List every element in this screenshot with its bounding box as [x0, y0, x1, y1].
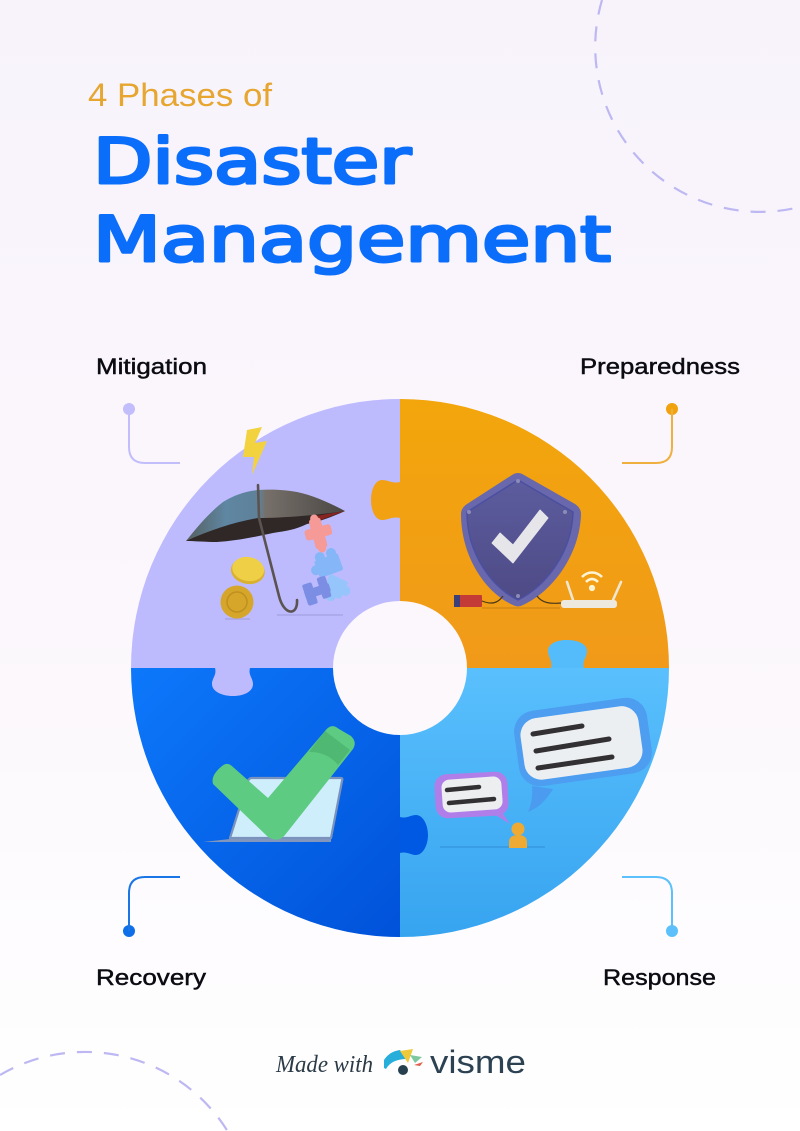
visme wordmark: visme: [430, 1044, 526, 1080]
check mark fold shadow: [309, 731, 350, 765]
laptop screen: [230, 778, 342, 838]
umbrella canopy: [186, 490, 345, 541]
ground shadows: [225, 615, 343, 619]
label: Mitigation: Mitigation: [96, 354, 207, 379]
label: Recovery: Recovery: [96, 965, 206, 990]
umbrella red lining: [312, 511, 345, 523]
puzzle tab: lilac into blue: [212, 668, 253, 696]
shield check mark: [492, 510, 548, 563]
coin top: [229, 554, 267, 587]
connector: Response: [622, 877, 678, 937]
made with text: Made with: [275, 1052, 373, 1078]
decorative dashed arc top right: [595, 0, 800, 212]
shield rivets: [467, 479, 567, 598]
router: [561, 582, 621, 608]
label: Preparedness: Preparedness: [580, 354, 740, 379]
shield outer: [461, 473, 581, 606]
puzzle tab: blue into sky: [400, 815, 428, 855]
puzzle wheel: [131, 399, 669, 937]
title block: [88, 77, 611, 276]
ground line: [440, 846, 545, 848]
puzzle piece light blue: [306, 546, 344, 580]
icon: speech bubbles with person: [434, 695, 655, 848]
label: Response: Response: [603, 965, 716, 990]
small speech bubble: [434, 771, 510, 824]
connector: Preparedness: [622, 403, 678, 463]
umbrella shaft and handle: [258, 485, 297, 612]
icon: laptop with green check: [203, 726, 355, 842]
person pawn: [509, 822, 527, 848]
main heading line 1: Disaster: [93, 125, 412, 198]
puzzle tab: sky into orange: [548, 640, 587, 668]
panel: mitigation quadrant: [131, 399, 400, 668]
main heading line 2: Management: [93, 203, 611, 276]
large speech bubble: [511, 695, 655, 812]
connecting wires: [482, 596, 561, 603]
shield inner: [467, 480, 573, 600]
panel: response quadrant: [400, 668, 669, 937]
connector: Recovery: [123, 877, 180, 937]
panel: recovery quadrant: [131, 668, 400, 937]
puzzle piece sky: [320, 574, 354, 607]
ground shadow: [482, 607, 560, 609]
puzzle piece periwinkle: [301, 575, 333, 606]
laptop base: [203, 839, 331, 842]
puzzle tab: orange into lilac: [371, 480, 400, 520]
icon: lightning bolt: [243, 427, 267, 475]
icon: umbrella with coins and puzzle pieces: [186, 427, 354, 619]
wifi symbol: [582, 572, 602, 590]
panel: preparedness quadrant: [400, 399, 669, 668]
footer: Made with Visme: [275, 1044, 526, 1080]
icon: shield with check, battery and router: [454, 473, 621, 608]
umbrella underside: [186, 511, 345, 542]
decorative dashed arc bottom left: [0, 1052, 228, 1131]
coin bottom: [220, 586, 254, 618]
icon: visme logo: [384, 1049, 423, 1075]
puzzle piece pink: [301, 511, 337, 556]
subtitle: 4 Phases of: [88, 77, 272, 113]
green check mark: [213, 726, 355, 840]
battery: [454, 595, 482, 607]
connector: Mitigation: [123, 403, 180, 463]
